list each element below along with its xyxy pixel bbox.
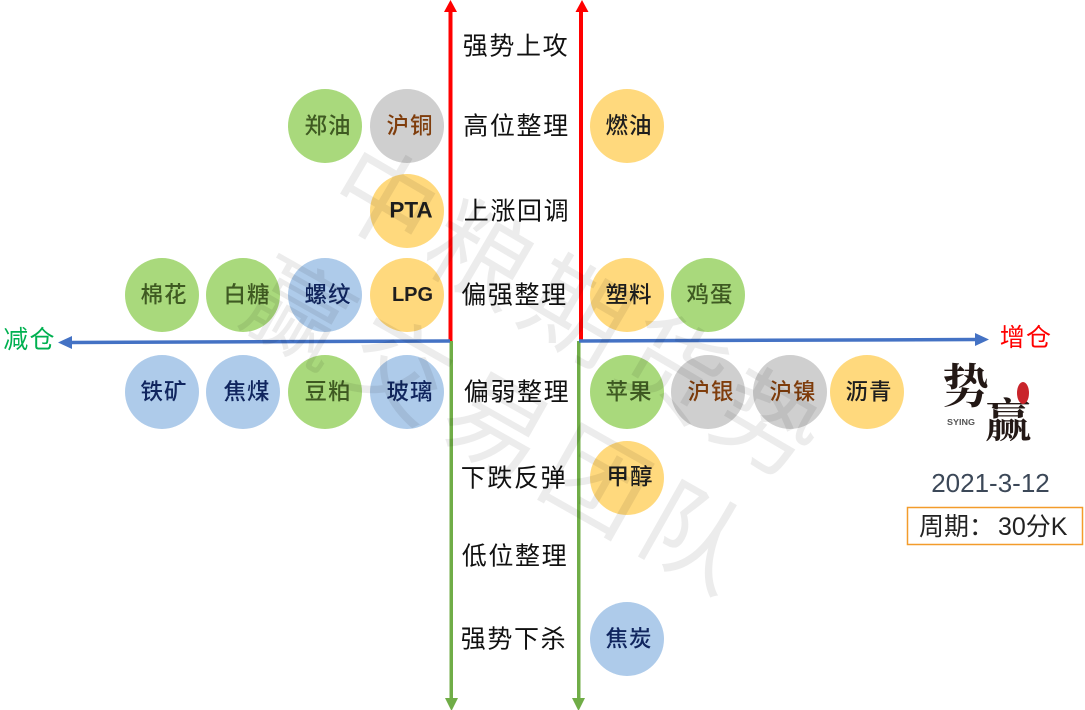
bubble: 沥青	[830, 355, 904, 429]
bubble: 甲醇	[590, 441, 664, 515]
bubble: 铁矿: 铁矿	[140, 380, 188, 404]
commodity bubbles	[125, 89, 904, 676]
trend state labels	[461, 32, 570, 654]
bubble: 棉花: 棉花	[140, 282, 188, 308]
state: falling rebound: 下跌反弹	[461, 464, 567, 492]
period text: 30分K	[998, 513, 1068, 541]
bubble: 玻璃	[370, 355, 444, 429]
bubble: PTA	[370, 174, 444, 248]
period box	[908, 508, 1082, 544]
bubble: 焦煤: 焦煤	[223, 380, 271, 404]
axis: right green down arrow	[572, 341, 585, 710]
bubble: 郑油	[288, 89, 362, 163]
period text: 周期：	[919, 513, 994, 541]
logo: SYING brush mark	[942, 350, 1031, 451]
axis: right red up arrow	[576, 0, 588, 341]
bubble: LPG	[370, 258, 444, 332]
bubble: 甲醇: 甲醇	[606, 464, 654, 490]
bubble: 白糖	[206, 258, 280, 332]
bubble: 焦煤	[206, 355, 280, 429]
bubble: LPG: LPG	[392, 284, 433, 306]
bubble: 豆粕	[288, 355, 362, 429]
bubble: 沪镍: 沪镍	[769, 380, 817, 404]
watermark line 2: 赢交易团队	[225, 240, 777, 620]
axis: left red up arrow	[444, 0, 457, 341]
bubble: 豆粕: 豆粕	[304, 380, 352, 404]
bubble: 沪银: 沪银	[687, 380, 735, 404]
axis: left green down arrow	[445, 341, 458, 710]
axis: left blue reduce arrow	[58, 336, 450, 349]
bubble: 燃油: 燃油	[605, 112, 653, 138]
logo wordmark: SYING	[947, 418, 975, 427]
state: strong attack: 强势上攻	[463, 32, 569, 60]
date: 2021-3-12	[931, 468, 1050, 498]
bubble: 沪镍	[753, 355, 827, 429]
bubble: 铁矿	[125, 355, 199, 429]
bubble: 玻璃: 玻璃	[386, 380, 434, 404]
bubble: 苹果: 苹果	[605, 380, 653, 404]
watermark line 1: 中粮期货势	[311, 126, 847, 505]
state: leaning weak: 偏弱整理	[464, 378, 570, 406]
state: strong decline: 强势下杀	[461, 626, 567, 654]
bubble: 螺纹: 螺纹	[304, 282, 352, 308]
state: low consolidation: 低位整理	[462, 542, 568, 570]
bubble: 燃油	[590, 89, 664, 163]
bubble: 焦炭: 焦炭	[605, 626, 653, 652]
state: rising pullback: 上涨回调	[464, 198, 570, 226]
bubble: 沪铜: 沪铜	[386, 114, 434, 138]
bubble: 鸡蛋	[671, 258, 745, 332]
bubble: 苹果	[590, 355, 664, 429]
label: add position: 增仓	[1000, 324, 1052, 352]
watermark	[225, 126, 847, 620]
axis: right blue add arrow	[579, 333, 989, 346]
state: leaning strong: 偏强整理	[461, 282, 568, 310]
bubble: 塑料: 塑料	[605, 282, 653, 308]
label: reduce position: 减仓	[3, 326, 56, 354]
bubble: 塑料	[590, 258, 664, 332]
state: high consolidation: 高位整理	[463, 112, 570, 140]
bubble: 棉花	[125, 258, 199, 332]
bubble: 郑油: 郑油	[304, 114, 352, 138]
bubble: 沪银	[671, 355, 745, 429]
logo glyph 势: 势	[942, 350, 989, 417]
bubble: PTA: PTA	[389, 198, 433, 222]
bubble: 焦炭	[590, 602, 664, 676]
bubble: 白糖: 白糖	[223, 282, 271, 308]
bubble: 鸡蛋: 鸡蛋	[686, 282, 734, 308]
logo glyph 赢: 赢	[985, 385, 1031, 451]
bubble: 沥青: 沥青	[845, 380, 893, 404]
logo seal	[1017, 382, 1029, 404]
bubble: 沪铜	[370, 89, 444, 163]
bubble: 螺纹	[288, 258, 362, 332]
